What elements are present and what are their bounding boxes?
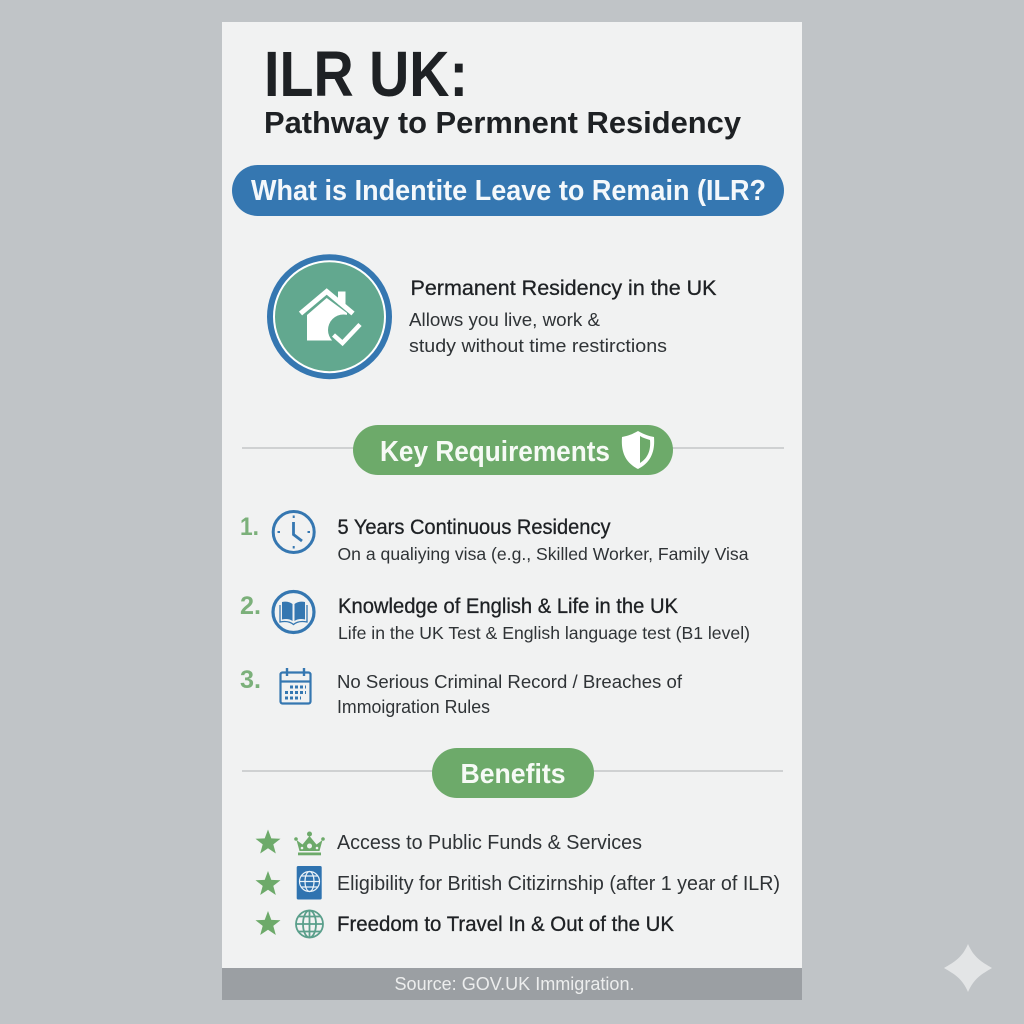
icon: star	[256, 830, 280, 854]
requirement 1: 5 Years Continuous Residency	[338, 516, 611, 539]
requirement 2: Knowledge of English & Life in the UK	[338, 595, 678, 618]
heading pill: benefits: Benefits	[460, 758, 566, 789]
requirement 1: 1.	[240, 513, 259, 541]
requirement 2: Life in the UK Test & English language test (B1 level)	[338, 623, 750, 643]
requirement 3: Immoigration Rules	[337, 696, 490, 717]
requirement 1	[240, 512, 749, 564]
requirement 1: On a qualiying visa (e.g., Skilled Worker, Family Visa	[338, 544, 749, 564]
requirement 3	[240, 666, 683, 717]
text block: permanent residency: Allows you live, work &	[409, 309, 601, 330]
icon: star	[256, 911, 280, 935]
benefit 1	[256, 830, 642, 855]
icon: crown	[294, 832, 325, 855]
icon: clock	[273, 512, 314, 552]
benefit 3	[256, 910, 674, 938]
icon: star	[256, 871, 280, 895]
heading pill: what is ILR: What is Indentite Leave to Remain (ILR?	[251, 175, 766, 207]
text block: permanent residency: Permanent Residency in the UK	[410, 276, 717, 300]
heading pill: benefits	[432, 748, 594, 798]
heading pill: key requirements: Key Requirements	[380, 436, 610, 468]
benefit 1: Access to Public Funds & Services	[337, 831, 642, 854]
heading pill: key requirements	[353, 425, 673, 475]
footer source bar: Source: GOV.UK Immigration.	[394, 974, 634, 994]
icon: passport	[297, 866, 322, 900]
requirement 3: 3.	[240, 666, 261, 694]
requirement 3: No Serious Criminal Record / Breaches of	[337, 671, 683, 692]
subtitle: Pathway to Permnent Residency	[264, 105, 742, 140]
title: ILR UK:	[264, 38, 468, 110]
icon: house with check in circle	[270, 257, 389, 376]
footer source bar	[222, 968, 802, 1000]
heading pill: what is ILR	[232, 165, 784, 216]
benefit 2: Eligibility for British Citizirnship (after 1 year of ILR)	[337, 872, 780, 895]
icon: shield	[622, 431, 654, 469]
requirement 2: 2.	[240, 592, 261, 620]
icon: globe	[296, 910, 323, 938]
icon: calendar	[280, 668, 310, 704]
infographic card	[222, 22, 802, 1000]
text block: permanent residency	[409, 276, 717, 356]
benefit 2	[256, 866, 780, 900]
icon: sparkle watermark	[944, 944, 992, 992]
benefit 3: Freedom to Travel In & Out of the UK	[337, 913, 674, 936]
requirement 2	[240, 592, 750, 643]
icon: book	[273, 592, 314, 632]
text block: permanent residency: study without time restirctions	[409, 335, 667, 356]
